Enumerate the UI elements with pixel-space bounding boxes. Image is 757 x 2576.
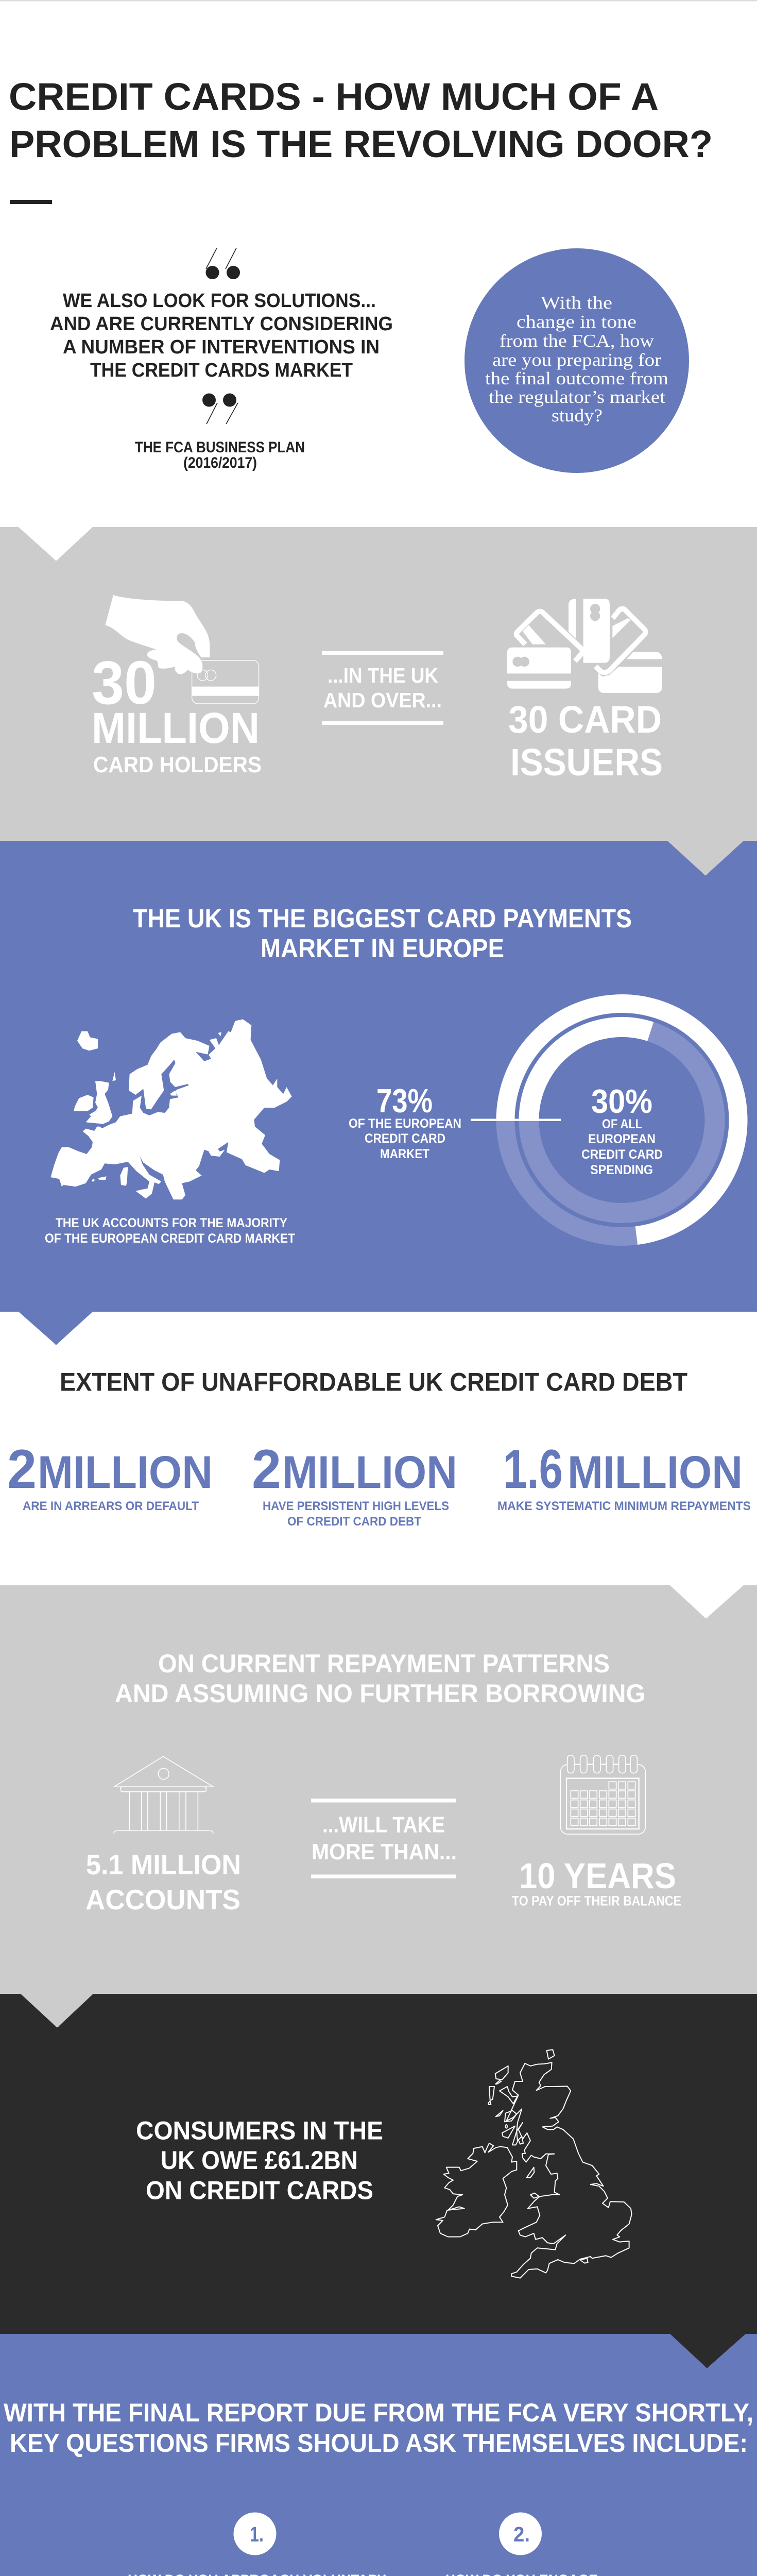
connector text: in the UK and over: ...IN THE UK [328,664,438,687]
stat: 5.1 million accounts: ACCOUNTS [85,1884,240,1916]
connector text: will take more than: ...WILL TAKE [322,1812,445,1837]
callout: question circle: change in tone [517,312,636,332]
panel: key questions [0,2334,757,2576]
stat: 30 card issuers: 30 CARD [508,698,662,741]
question 2 [421,2512,622,2576]
stat: 2 million in arrears: MILLION [38,1446,213,1498]
map caption: OF THE EUROPEAN CREDIT CARD MARKET [45,1231,295,1246]
stat: 30 million card holders [92,649,262,777]
stat: 73 percent [349,1082,461,1161]
section notch [21,1994,93,2027]
quote attribution: THE FCA BUSINESS PLAN [135,439,305,456]
connector text: will take more than: MORE THAN... [312,1839,457,1865]
panel: consumer debt [0,1994,757,2334]
stat: 73 percent: MARKET [380,1147,429,1161]
stat: 2 million in arrears: ARE IN ARREARS OR DEFAULT [23,1499,199,1513]
panel: intro [0,0,757,527]
question 1: 1. [250,2522,264,2546]
quote text: AND ARE CURRENTLY CONSIDERING [50,313,393,335]
title: CREDIT CARDS - HOW MUCH OF A [9,75,659,118]
stat: 10 years [512,1856,681,1908]
stat: 2 million persistent debt: MILLION [282,1446,457,1498]
heading: EXTENT OF UNAFFORDABLE UK CREDIT CARD DEBT [60,1367,687,1396]
stat: 30 percent: SPENDING [590,1163,653,1177]
stat: 10 years: 10 YEARS [519,1856,676,1896]
stat: 5.1 million accounts: 5.1 MILLION [86,1849,241,1880]
section notch [19,527,93,561]
section notch [670,1585,744,1618]
stat: 30 card issuers: ISSUERS [510,741,663,784]
heading: ON CURRENT REPAYMENT PATTERNS [158,1649,610,1678]
stat: 73 percent: OF THE EUROPEAN [349,1116,461,1131]
stat: 30 percent: CREDIT CARD [581,1147,663,1162]
connector text: in the UK and over: AND OVER... [323,688,442,712]
statement text: UK OWE £61.2BN [161,2146,358,2175]
heading: THE UK IS THE BIGGEST CARD PAYMENTS [133,904,632,933]
stat: 1.6 million minimum repayments: MAKE SYSTEMATIC MINIMUM REPAYMENTS [497,1499,751,1513]
icon: calendar [560,1755,645,1834]
stat: 2 million in arrears [7,1438,213,1513]
stat: 30 percent [581,1082,663,1177]
callout: question circle [464,248,689,473]
quote attribution [135,439,305,471]
icon: bank building [114,1756,213,1834]
icon: opening quote mark [206,248,240,279]
stat: 1.6 million minimum repayments: 1.6 [503,1438,563,1500]
stat: 30 percent: 30% [591,1082,652,1120]
map: UK and Ireland outline [436,2049,632,2278]
panel: biggest card payments market [0,841,757,1312]
quote text: THE CREDIT CARDS MARKET [90,360,353,381]
panel: extent of unaffordable debt [0,1312,757,1585]
title [9,75,713,165]
stat: 30 card issuers [508,698,663,784]
quote attribution: (2016/2017) [183,454,257,471]
statement text: ON CREDIT CARDS [146,2176,373,2205]
panel: repayment patterns [0,1585,757,1994]
callout: question circle: the regulator’s market [489,387,665,407]
stat: 30 million card holders: CARD HOLDERS [93,752,262,777]
heading [115,1649,645,1708]
map: Europe [50,1019,292,1199]
icon: closing quote mark [202,394,238,424]
section notch [667,841,744,875]
heading: MARKET IN EUROPE [261,934,504,963]
question 2: 2. [513,2522,530,2546]
quote text [50,290,393,381]
callout: question circle: from the FCA, how [500,331,655,351]
title: PROBLEM IS THE REVOLVING DOOR? [9,123,713,165]
stat: 30 percent: EUROPEAN [588,1132,656,1146]
heading [4,2398,753,2458]
stat: 10 years: TO PAY OFF THEIR BALANCE [512,1893,681,1908]
stat: 73 percent: CREDIT CARD [365,1131,445,1146]
stat: 30 million card holders: 30 [92,649,157,717]
callout: question circle: study? [552,405,603,426]
heading [133,904,632,963]
map caption [45,1216,295,1246]
panel: card holders and issuers [0,527,757,841]
stat: 30 percent: OF ALL [602,1117,642,1131]
stat: 1.6 million minimum repayments [497,1438,751,1513]
quote text: A NUMBER OF INTERVENTIONS IN [63,336,380,358]
connector text: will take more than [311,1799,457,1878]
callout: question circle: With the [541,293,612,313]
icon: fan of credit cards [507,599,662,693]
heading: AND ASSUMING NO FURTHER BORROWING [115,1679,645,1708]
quote text: WE ALSO LOOK FOR SOLUTIONS... [63,290,376,312]
stat: 2 million persistent debt [252,1438,457,1529]
callout: question circle: are you preparing for [492,350,661,370]
map caption: THE UK ACCOUNTS FOR THE MAJORITY [56,1216,287,1230]
stat: 1.6 million minimum repayments: MILLION [567,1446,743,1498]
icon: hand holding card [105,595,259,704]
question 1 [128,2512,386,2576]
stat: 30 million card holders: MILLION [92,704,260,752]
callout: question circle: the final outcome from [485,368,668,388]
statement text: CONSUMERS IN THE [136,2116,383,2145]
stat: 2 million persistent debt: 2 [252,1438,281,1500]
stat: 2 million persistent debt: HAVE PERSISTENT HIGH LEVELS [263,1499,449,1513]
title rule [10,200,52,204]
chart: concentric ring chart [471,1004,738,1236]
stat: 2 million in arrears: 2 [7,1438,37,1500]
statement text [136,2116,383,2205]
section notch [19,1312,93,1345]
section notch [670,2334,746,2368]
stat: 2 million persistent debt: OF CREDIT CARD DEBT [287,1515,421,1529]
stat: 5.1 million accounts [85,1849,241,1916]
connector text: in the UK and over [322,651,443,725]
stat: 73 percent: 73% [376,1082,433,1120]
